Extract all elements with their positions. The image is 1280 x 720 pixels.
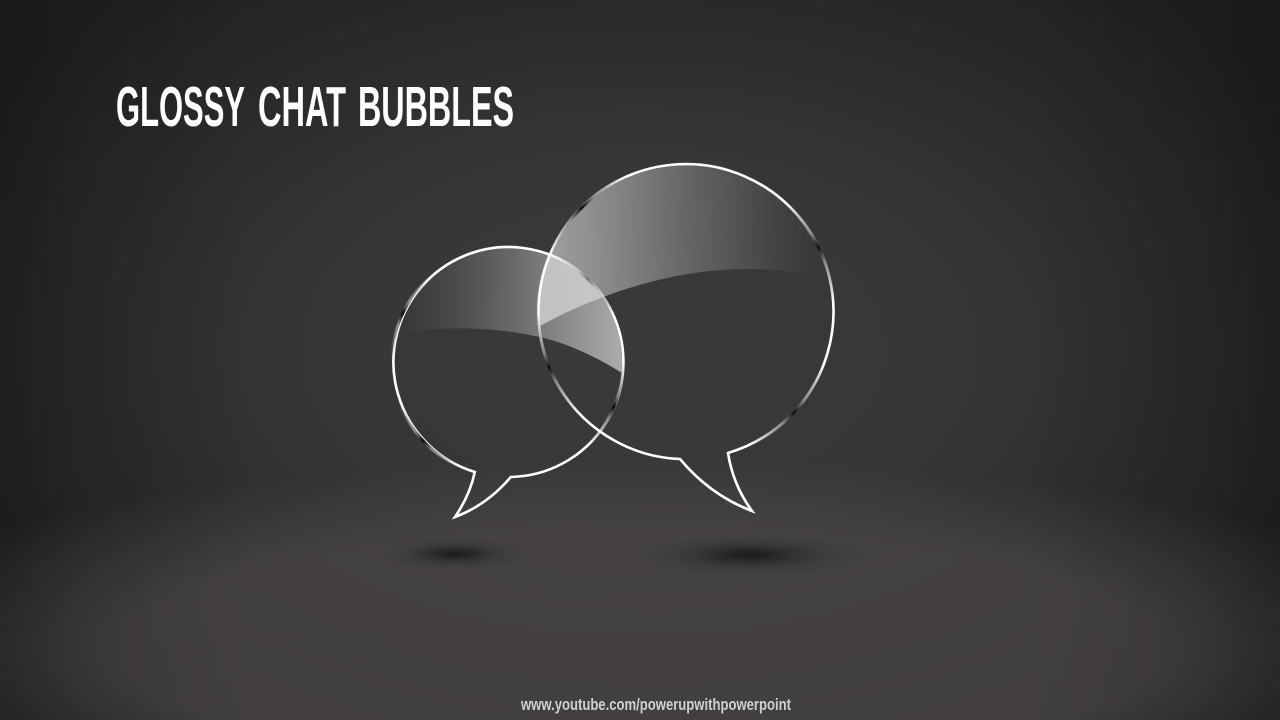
small bubble outline bbox=[393, 247, 623, 517]
background: lit floor bbox=[0, 440, 1280, 720]
title: GLOSSY bbox=[116, 75, 245, 139]
large chat bubble bbox=[530, 150, 840, 511]
small chat bubble bbox=[385, 240, 630, 517]
shadow: large bubble bbox=[632, 533, 868, 577]
footer url: www.youtube.com/powerupwithpowerpoint bbox=[520, 695, 791, 714]
title: BUBBLES bbox=[358, 75, 514, 139]
shadow: small bubble bbox=[380, 537, 530, 571]
large bubble metallic reflections bbox=[538, 176, 833, 446]
large bubble gloss highlight bbox=[540, 166, 788, 326]
small bubble gloss highlight bbox=[426, 248, 622, 373]
title: CHAT bbox=[258, 75, 346, 139]
title bbox=[116, 75, 514, 139]
small bubble metallic reflections bbox=[392, 255, 623, 467]
large bubble outline bbox=[538, 164, 833, 511]
